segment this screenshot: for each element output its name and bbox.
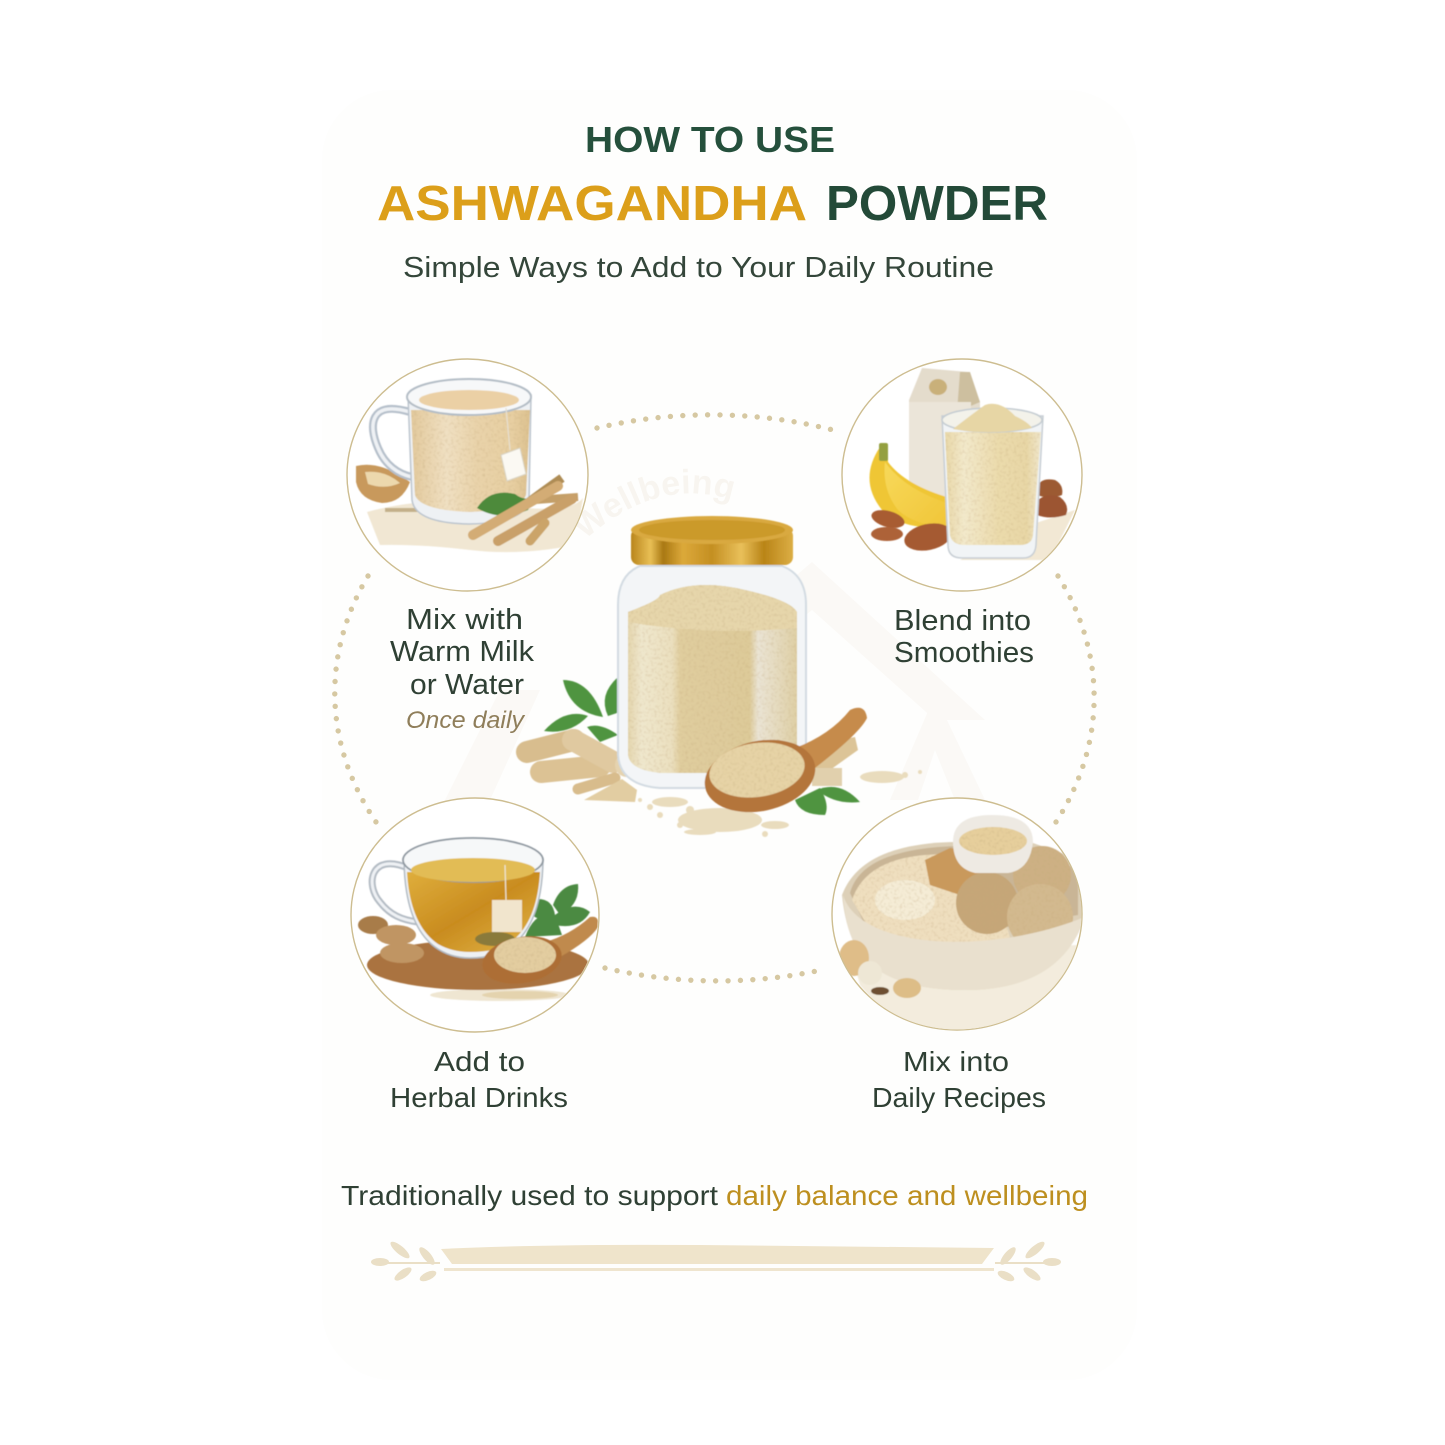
decorative banner — [371, 1239, 1061, 1283]
illustration: bowl scene — [839, 815, 1082, 1030]
label: warm milk: or Water — [410, 669, 524, 701]
footer statement — [341, 1180, 1088, 1211]
label: herbal drinks — [390, 1046, 568, 1113]
title line: ashwagandha powder — [377, 177, 1048, 231]
label: herbal drinks: Add to — [434, 1046, 525, 1077]
illustration: tea scene — [358, 838, 598, 1001]
label: warm milk — [390, 604, 535, 734]
panel: smoothie glass — [842, 359, 1082, 591]
title — [377, 119, 1048, 231]
circle frame — [842, 359, 1082, 591]
title line: ashwagandha powder: POWDER — [826, 177, 1048, 231]
roots left — [527, 740, 639, 802]
right sprig — [995, 1239, 1061, 1283]
soft panel behind content — [322, 90, 1137, 1380]
illustration: smoothie scene — [869, 368, 1075, 560]
label: smoothies — [894, 605, 1034, 669]
central jar illustration — [527, 516, 922, 837]
panel: herbal tea cup — [351, 798, 599, 1032]
note: once daily: Once daily — [406, 707, 526, 734]
scattered powder — [638, 770, 922, 837]
footer statement: daily balance and wellbeing — [726, 1180, 1088, 1211]
panel: recipe bowl — [832, 798, 1082, 1030]
jar glass — [618, 566, 806, 788]
label: smoothies: Blend into — [894, 605, 1031, 637]
label: daily recipes: Daily Recipes — [872, 1082, 1046, 1113]
footer statement: Traditionally used to support — [341, 1180, 718, 1211]
leaves right — [795, 787, 860, 815]
title line: ashwagandha powder: ASHWAGANDHA — [377, 177, 807, 231]
circle frame — [347, 359, 588, 591]
illustration: mug scene — [356, 379, 583, 552]
circle frame — [351, 798, 599, 1032]
jar lid — [631, 516, 793, 565]
brush band — [441, 1245, 994, 1264]
roots right — [812, 737, 858, 786]
label: herbal drinks: Herbal Drinks — [390, 1082, 568, 1113]
panel: warm milk mug — [347, 359, 588, 591]
left sprig — [371, 1239, 440, 1283]
wooden spoon — [698, 708, 867, 822]
title line: how to use: HOW TO USE — [585, 119, 835, 160]
circle frame — [832, 798, 1082, 1030]
jar powder — [628, 585, 797, 773]
powder mound — [628, 585, 797, 631]
underline — [444, 1268, 994, 1271]
leaves left — [544, 677, 620, 742]
subtitle: Simple Ways to Add to Your Daily Routine — [403, 252, 994, 284]
label: warm milk: Warm Milk — [390, 636, 535, 668]
label: smoothies: Smoothies — [894, 637, 1034, 669]
label: daily recipes — [872, 1046, 1046, 1113]
dotted ring — [335, 415, 1094, 981]
label: daily recipes: Mix into — [903, 1046, 1009, 1077]
watermark: Wellbeing — [576, 469, 734, 536]
label: warm milk: Mix with — [406, 604, 523, 636]
